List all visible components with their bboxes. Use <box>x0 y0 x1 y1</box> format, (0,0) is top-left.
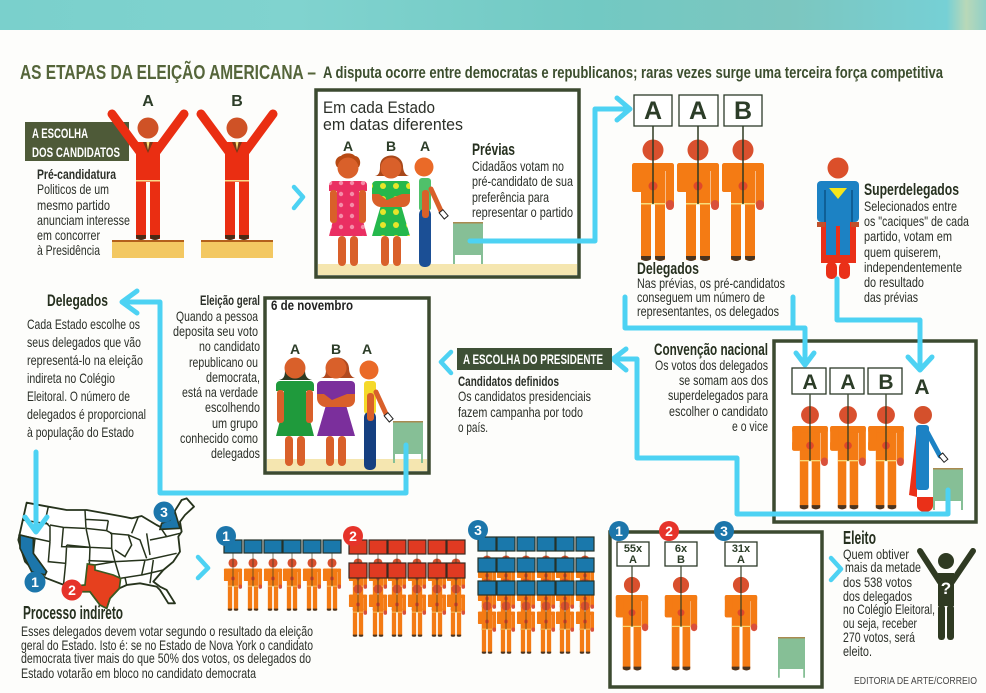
text: superdelegados <box>864 180 969 305</box>
text: delegados estaduais <box>27 291 146 440</box>
panel: electoral college vote: A <box>737 554 745 566</box>
text: delegados estaduais: Cada Estado escolhe os <box>27 316 140 332</box>
panel: primaries: pré-candidato de sua <box>472 173 573 189</box>
panel: convention: A <box>840 371 856 394</box>
text: processo indireto: geral do Estado. Isto é: se no Estado de Nova York o candidato <box>21 637 313 653</box>
chevron: vote to elected <box>831 558 841 580</box>
text: eleito: 270 votos, será <box>843 629 915 645</box>
text: superdelegados: partido, votam em <box>864 228 952 244</box>
panel: electoral college vote: 2 <box>665 523 673 539</box>
text: eleição geral: um grupo <box>212 415 258 431</box>
text: eleição geral: conhecido como <box>180 430 258 446</box>
candidates on podiums <box>112 93 273 258</box>
map of the United States: 3 <box>160 504 168 520</box>
delegates group: A <box>644 97 662 125</box>
text: eleito: dos delegados <box>843 588 912 604</box>
top teal band <box>0 0 986 30</box>
text: eleição geral <box>173 292 260 461</box>
title: AS ETAPAS DA ELEIÇÃO AMERICANA – <box>20 61 316 84</box>
panel: electoral college vote: 3 <box>720 523 728 539</box>
text: convenção nacional <box>654 340 768 434</box>
text: eleito: mais da metade <box>845 559 921 575</box>
text: eleito: eleito. <box>843 643 872 659</box>
text: delegados estaduais: seus delegados que vão <box>27 334 141 350</box>
text: eleito: dos 538 votos <box>843 574 912 590</box>
delegate group 1 <box>216 526 341 611</box>
panel: convention: A <box>914 376 930 399</box>
text: candidatos definidos: o país. <box>458 419 488 435</box>
text: pré-candidatura: mesmo partido <box>37 197 110 213</box>
panel: electoral college vote: 55x <box>624 543 643 555</box>
panel: general election: A <box>362 341 372 357</box>
text: pré-candidatura: à Presidência <box>37 242 100 258</box>
text: eleito: Eleito <box>843 528 876 548</box>
panel: primaries: A <box>343 138 353 154</box>
text: processo indireto: Esses delegados devem votar segundo o resultado da eleição <box>21 623 313 639</box>
panel: primaries: Em cada Estado <box>323 98 435 117</box>
text: delegados estaduais: indireta no Colégio <box>27 370 115 386</box>
delegates group <box>632 95 764 261</box>
text: delegados estaduais: representá-lo na eleição <box>27 352 143 368</box>
text: delegados estaduais: Delegados <box>47 291 108 310</box>
text: processo indireto: democrata tiver mais do que 50% dos votos, os delegados do <box>21 650 311 666</box>
label: a escolha do presidente <box>457 348 612 370</box>
panel: general election: B <box>331 341 341 357</box>
text: eleição geral: Quando a pessoa <box>176 308 258 324</box>
text: candidatos definidos: Candidatos definidos <box>458 373 559 389</box>
panel: electoral college vote: A <box>629 554 637 566</box>
title <box>20 61 943 84</box>
arrow: general election to delegados <box>122 291 406 493</box>
text: convenção nacional: e o vice <box>732 418 768 434</box>
panel: electoral college vote: 1 <box>615 523 623 539</box>
candidates on podiums: A <box>142 93 154 110</box>
text: eleito: ou seja, receber <box>843 615 917 631</box>
chevron: map to groups <box>198 557 208 578</box>
text: pré-candidatura: em concorrer <box>37 227 100 243</box>
arrow: convention to president choice <box>613 349 948 514</box>
panel: electoral college vote <box>609 521 822 687</box>
text: delegados: Nas prévias, os pré-candidatos <box>637 275 785 291</box>
text: processo indireto: Processo indireto <box>23 603 123 623</box>
label: a escolha dos candidatos <box>25 122 129 161</box>
delegate group 1: 1 <box>222 528 230 544</box>
icon: elected mystery figure: ? <box>941 579 951 598</box>
text: eleição geral: escolhendo <box>205 399 260 415</box>
text: eleição geral: no candidato <box>199 338 260 354</box>
map of the United States: 1 <box>31 574 39 590</box>
panel: primaries: A <box>420 138 430 154</box>
text: delegados estaduais: à população do Estado <box>27 424 134 440</box>
panel: primaries: Prévias <box>472 140 515 159</box>
candidates on podiums: B <box>231 93 243 110</box>
panel: electoral college vote: B <box>677 554 685 566</box>
text: superdelegados: independentemente <box>864 259 962 275</box>
text: candidatos definidos: Os candidatos presidenciais <box>458 388 591 404</box>
delegate group 3: 3 <box>474 522 482 538</box>
panel: convention <box>774 341 976 522</box>
text: delegados estaduais: Eleitoral. O número de <box>27 388 130 404</box>
delegate group 2: 2 <box>349 528 357 544</box>
panel: general election <box>265 297 429 473</box>
text: eleito: no Colégio Eleitoral, <box>843 601 935 617</box>
panel: electoral college vote: 6x <box>675 543 688 555</box>
chevron 1 <box>294 187 303 208</box>
panel: primaries: em datas diferentes <box>323 115 463 134</box>
text: candidatos definidos: fazem campanha por todo <box>458 404 583 420</box>
arrow: superdelegate to convention <box>837 279 932 370</box>
text: delegados: conseguem um número de <box>637 289 765 305</box>
text: pré-candidatura <box>37 166 130 258</box>
panel: general election: A <box>290 341 300 357</box>
delegates group: A <box>689 97 707 125</box>
text: superdelegados: do resultado <box>864 274 924 290</box>
text: superdelegados: das prévias <box>864 289 918 305</box>
text: eleição geral: deposita seu voto <box>173 323 258 339</box>
superdelegate figure <box>817 158 859 279</box>
text: pré-candidatura: Politicos de um <box>37 181 109 197</box>
text: delegados: representantes, os delegados <box>637 303 779 319</box>
text: delegados: Delegados <box>637 259 699 278</box>
delegates group: B <box>734 97 752 125</box>
text: convenção nacional: superdelegados para <box>668 387 768 403</box>
panel: electoral college vote: 31x <box>732 543 751 555</box>
text: superdelegados: quem quiserem, <box>864 244 941 260</box>
panel: primaries <box>316 90 579 277</box>
label: a escolha do presidente: A ESCOLHA DO PRESIDENTE <box>463 351 603 367</box>
panel: convention: A <box>802 371 818 394</box>
text: pré-candidatura: Pré-candidatura <box>37 166 116 182</box>
text: convenção nacional: Convenção nacional <box>654 340 768 359</box>
text: convenção nacional: Os votos dos delegados <box>655 357 768 373</box>
text: convenção nacional: se somam aos dos <box>679 372 768 388</box>
map of the United States: 2 <box>68 582 76 598</box>
panel: primaries: representar o partido <box>472 204 573 220</box>
text: eleito: Quem obtiver <box>843 546 909 562</box>
text: eleição geral: está na verdade <box>182 384 258 400</box>
text: convenção nacional: escolher o candidato <box>669 403 768 419</box>
text: processo indireto: Estado votarão em bloco no candidato democrata <box>21 665 256 681</box>
icon: elected mystery figure <box>920 551 973 640</box>
arrow: primaries to delegates <box>470 98 630 241</box>
text: delegados <box>637 259 785 319</box>
map of the United States <box>18 498 194 608</box>
arrow: delegates to convention <box>625 297 814 365</box>
panel: primaries: B <box>386 138 396 154</box>
text: candidatos definidos <box>458 373 591 435</box>
panel: primaries: preferência para <box>472 189 549 205</box>
arrow: delegados down to map <box>25 452 47 532</box>
text: processo indireto <box>21 603 313 681</box>
delegate group 2 <box>343 526 465 637</box>
chevron: president choice <box>441 352 451 373</box>
text: delegados estaduais: delegados é proporcional <box>27 406 146 422</box>
text: eleição geral: democrata, <box>206 369 260 385</box>
label: a escolha dos candidatos: A ESCOLHA <box>32 125 88 141</box>
text: eleição geral: Eleição geral <box>200 292 260 308</box>
text: pré-candidatura: anunciam interesse <box>37 212 130 228</box>
label: a escolha dos candidatos: DOS CANDIDATOS <box>32 144 120 160</box>
text: superdelegados: Selecionados entre <box>864 198 957 214</box>
panel: primaries: Cidadãos votam no <box>472 158 564 174</box>
panel: convention: B <box>878 371 894 394</box>
panel: general election: 6 de novembro <box>271 297 353 313</box>
text: eleição geral: republicano ou <box>189 354 258 370</box>
delegate group 3 <box>468 520 594 654</box>
text: eleição geral: delegados <box>211 445 260 461</box>
text: eleito <box>843 528 935 659</box>
